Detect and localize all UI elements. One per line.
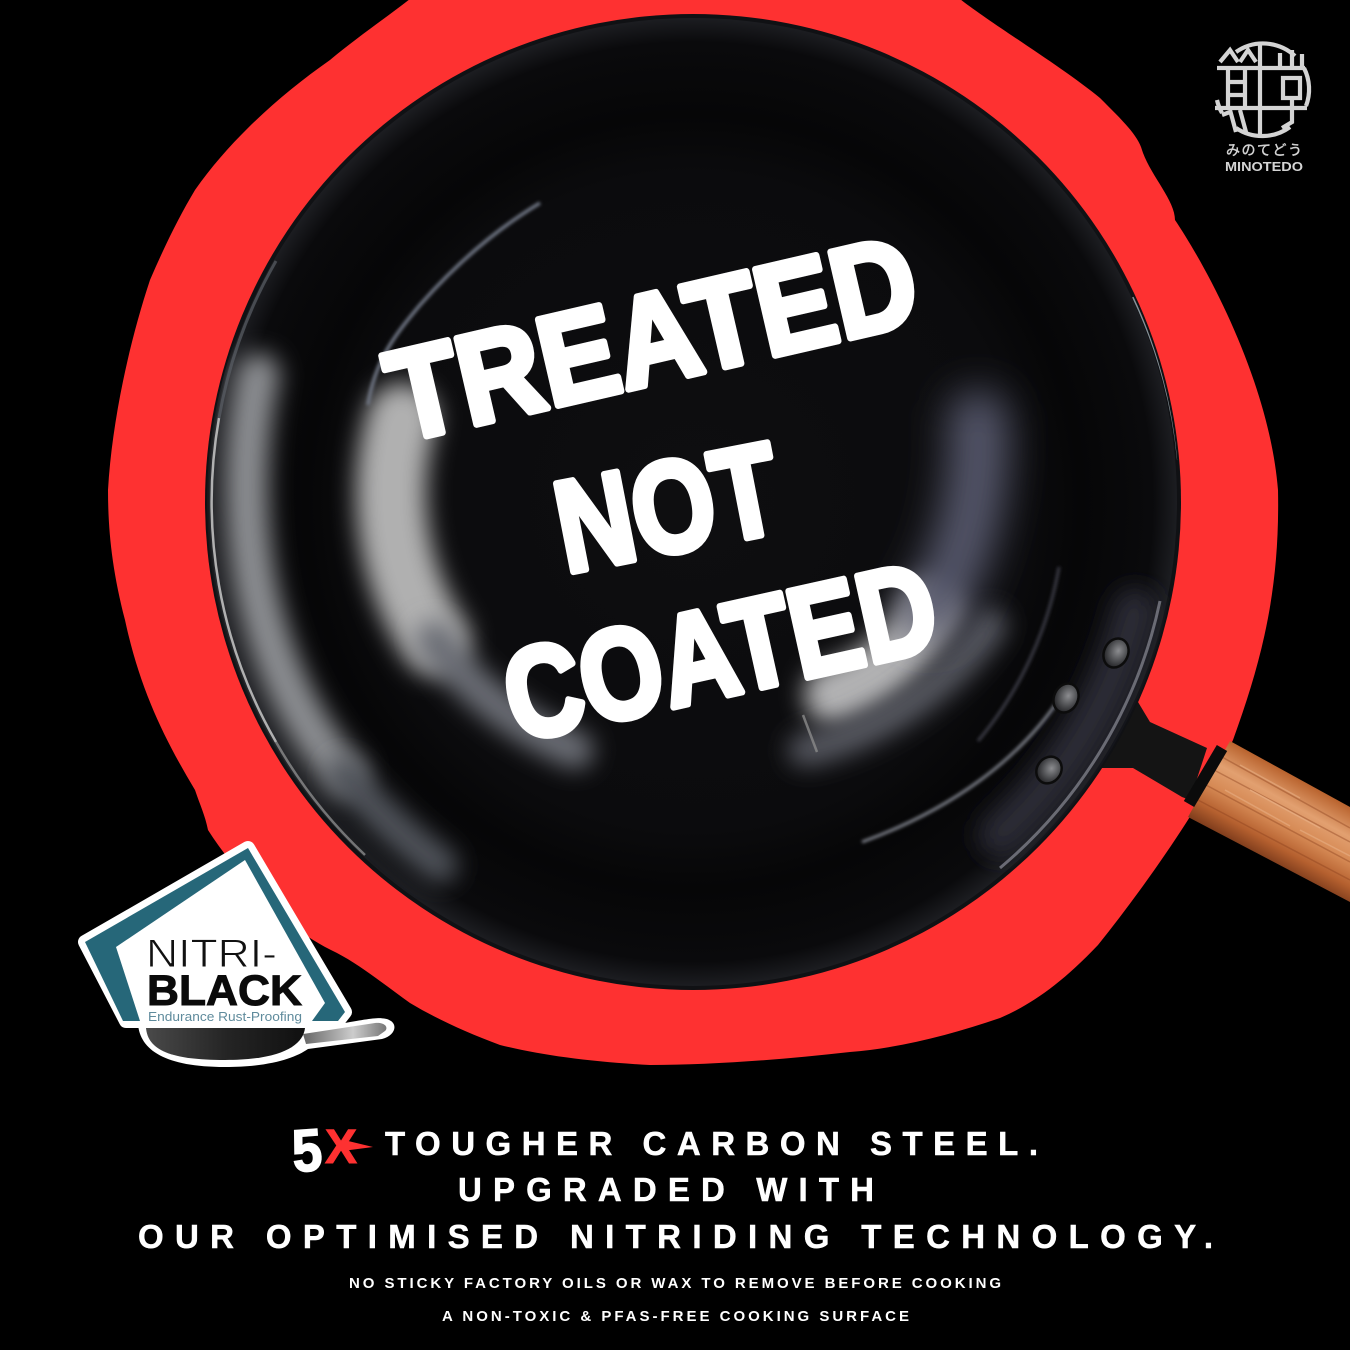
x brush tail [338, 1140, 373, 1151]
badge white outline [85, 848, 345, 1021]
rivets [1031, 634, 1133, 788]
wooden grip [1188, 741, 1350, 902]
upper left arc highlight [368, 203, 540, 405]
rivet top [1099, 634, 1133, 672]
mini pan body [146, 1028, 305, 1060]
inner left reflection [391, 418, 435, 640]
lower right reflection glow [805, 625, 990, 750]
wood grain [1198, 757, 1350, 880]
nitri-black badge [85, 848, 394, 1067]
badge tagline: Endurance Rust-Proofing [148, 1009, 302, 1024]
outer left reflection tail [345, 775, 440, 865]
logo latin name: MINOTEDO [1225, 159, 1303, 174]
small glint [803, 715, 817, 752]
handle collar [1189, 748, 1222, 804]
headline word: not: NOT [543, 414, 791, 600]
lower right reflection [835, 610, 930, 695]
wok handle [1098, 697, 1350, 902]
mini pan handle [303, 1023, 386, 1044]
line one: TOUGHER CARBON STEEL. [385, 1125, 1038, 1162]
steel neck [1098, 697, 1207, 800]
five times mark [290, 1116, 373, 1185]
lower right steel band [1000, 610, 1135, 835]
logo japanese name: みのてどう [1226, 142, 1302, 158]
right reflection [930, 420, 979, 610]
badge teal frame [85, 848, 345, 1021]
numeral five: 5 [290, 1116, 324, 1185]
line two: UPGRADED WITH [458, 1171, 874, 1208]
inner left reflection tail [435, 640, 575, 750]
headline word: treated: TREATED [374, 209, 931, 469]
tagline block [138, 1116, 1213, 1325]
rim highlights [212, 261, 1178, 868]
note two: A NON-TOXIC & PFAS-FREE COOKING SURFACE [442, 1308, 909, 1325]
wok pan body [205, 14, 1181, 990]
red x: X [325, 1121, 357, 1174]
rivet bottom [1031, 752, 1067, 788]
badge inner panel [116, 860, 325, 1021]
headline: treated not coated [374, 209, 950, 769]
line three: OUR OPTIMISED NITRIDING TECHNOLOGY. [138, 1218, 1213, 1255]
red brush blob [108, 0, 1278, 1065]
mini pan outline [138, 1018, 394, 1067]
badge word: black: BLACK [147, 967, 302, 1015]
badge word: nitri: NITRI- [146, 932, 277, 976]
note one: NO STICKY FACTORY OILS OR WAX TO REMOVE BEFORE COOKING [349, 1275, 1001, 1292]
brand logo: minotedo [1215, 43, 1309, 174]
logo emblem [1215, 43, 1309, 136]
headline word: coated: COATED [491, 535, 950, 769]
rivet middle [1049, 679, 1083, 717]
outer left reflection [246, 375, 345, 775]
lower right arc highlight [862, 695, 1062, 842]
